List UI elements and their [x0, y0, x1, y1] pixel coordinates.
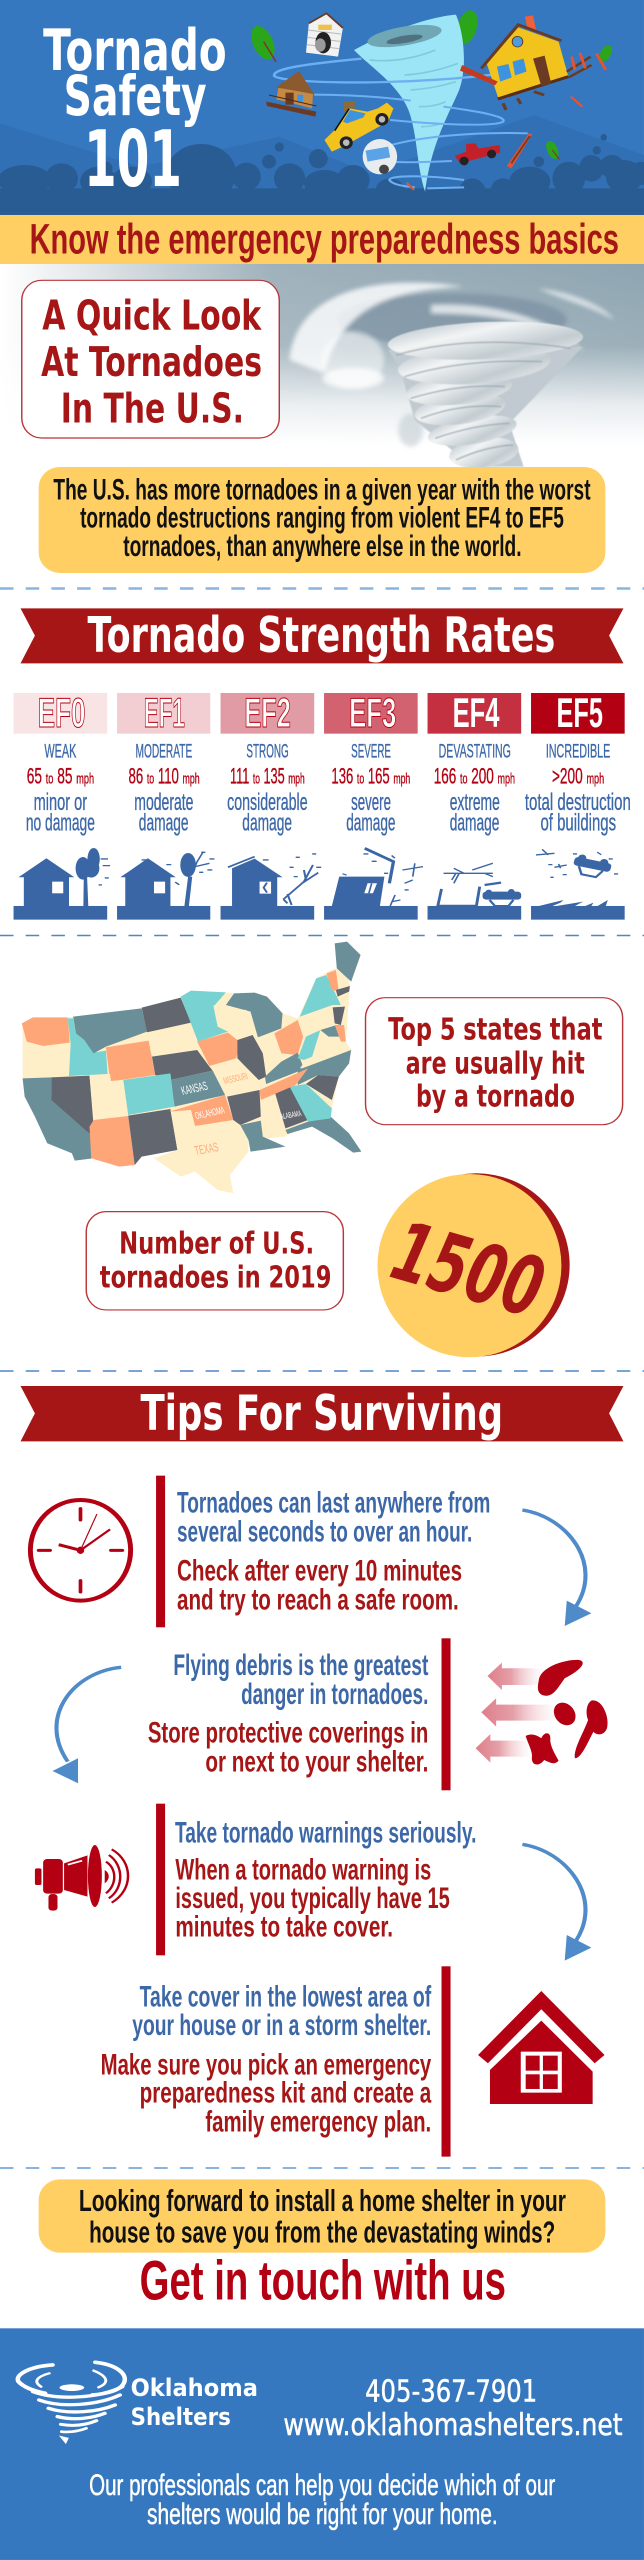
- damage descriptions: no damage: [26, 809, 95, 836]
- callout: number of tornadoes: Number of U.S.: [119, 1226, 314, 1261]
- tip: warnings: minutes to take cover.: [175, 1910, 393, 1943]
- dark bush skyline: [0, 134, 644, 215]
- callout: top 5 states: [366, 998, 623, 1125]
- state labels: TEXAS: [193, 1140, 220, 1158]
- wind speeds: 136 to 165 mph: [331, 765, 410, 789]
- icon: EF3 collapsed house: [324, 848, 423, 920]
- panel: header: [0, 0, 644, 265]
- text block: U.S. facts: [39, 467, 605, 573]
- EF scale labels: EF0: [38, 690, 85, 736]
- logo: wordmark: [131, 2375, 258, 2431]
- icon: EF0 house and tree: [14, 848, 110, 920]
- panel: tips bottom: [35, 1804, 605, 2157]
- icon: grey tornado: [290, 283, 614, 472]
- icon: leaves: [246, 9, 614, 160]
- EF scale labels: EF1: [144, 690, 185, 736]
- panel: call to action and footer: [0, 2179, 644, 2560]
- panel: quick look background: [0, 264, 644, 445]
- map: United States: [22, 942, 361, 1193]
- divider bar: [442, 1638, 451, 1790]
- icon: debris planks: [407, 65, 532, 190]
- tip: debris: or next to your shelter.: [205, 1745, 428, 1778]
- icon: funnel tornado: [354, 15, 464, 192]
- panel: strength rates: [14, 607, 631, 920]
- logo: wordmark: Shelters: [131, 2404, 231, 2431]
- damage descriptions: considerable: [227, 789, 308, 815]
- yellow band: [0, 215, 644, 265]
- icon: yellow taxi: [324, 102, 393, 152]
- icon: house: [478, 1991, 605, 2104]
- tip: debris: danger in tornadoes.: [241, 1677, 428, 1710]
- callout: shelter question: [39, 2179, 605, 2253]
- badge circle: [377, 1173, 570, 1357]
- damage descriptions: damage: [450, 809, 499, 836]
- category names: SEVERE: [351, 741, 391, 762]
- panel: tips top: [21, 1385, 623, 1790]
- EF scale labels: EF3: [349, 690, 396, 736]
- icon: EF1 house and tree: [117, 852, 214, 920]
- panel: quick look: [22, 280, 614, 573]
- icon: EF2 damaged house: [221, 853, 321, 920]
- tip: warnings: When a tornado warning is: [175, 1853, 431, 1886]
- icon: EF5 debris and flipped car: [531, 849, 625, 920]
- title: [43, 17, 227, 205]
- icon: dog house: [306, 13, 343, 57]
- title: Safety: [64, 64, 207, 128]
- tip: take cover: preparedness kit and create a: [140, 2076, 432, 2109]
- callout: A Quick Look: At Tornadoes: [41, 339, 262, 386]
- icon: camper: [363, 139, 397, 174]
- EF scale labels: EF4: [453, 690, 500, 736]
- arrow: curved right: [522, 1844, 591, 1961]
- logo: wordmark: Oklahoma: [131, 2375, 258, 2402]
- damage descriptions: moderate: [134, 789, 193, 815]
- callout: number of tornadoes: [86, 1212, 343, 1310]
- wind speeds: 166 to 200 mph: [434, 765, 515, 789]
- damage descriptions: damage: [242, 809, 292, 836]
- logo: tornado: [18, 2362, 125, 2443]
- icon: clock: [30, 1500, 131, 1601]
- callout: A Quick Look: [22, 280, 279, 438]
- category names: [44, 741, 610, 762]
- contact details: [283, 2374, 623, 2443]
- footer text: [89, 2469, 555, 2531]
- tip: take cover: family emergency plan.: [205, 2105, 431, 2138]
- arrow: curved right: [522, 1510, 591, 1626]
- state labels: KANSAS: [179, 1079, 209, 1098]
- wind speeds: 86 to 110 mph: [129, 765, 200, 789]
- divider bar: [442, 1966, 451, 2157]
- damage descriptions: extreme: [450, 789, 500, 815]
- icon: flying debris: [476, 1660, 608, 1765]
- damage descriptions: severe: [351, 789, 391, 815]
- tip: warnings: [175, 1816, 476, 1943]
- damage descriptions: [26, 789, 631, 836]
- statistic: 1500: 1500: [382, 1204, 554, 1337]
- tip: debris: [148, 1648, 428, 1778]
- tip: duration: [177, 1486, 490, 1616]
- wind speeds: 111 to 135 mph: [230, 765, 305, 789]
- damage descriptions: damage: [139, 809, 189, 836]
- callout: A Quick Look: In The U.S.: [61, 385, 244, 432]
- state labels: OKLAHOMA: [194, 1105, 226, 1122]
- callout: A Quick Look: A Quick Look: [42, 292, 262, 339]
- damage descriptions: minor or: [34, 789, 87, 815]
- wind speeds: 65 to 85 mph: [27, 765, 94, 789]
- panel: map and statistics: [22, 942, 623, 1357]
- icon: wooden cabin: [266, 71, 316, 117]
- callout: number of tornadoes: tornadoes in 2019: [100, 1260, 331, 1295]
- state labels: MISSOURI: [222, 1072, 249, 1087]
- title: 101: [84, 115, 182, 205]
- spiral wind lines: [274, 59, 528, 188]
- icon: red truck: [455, 143, 500, 165]
- wind speeds: >200 mph: [552, 765, 604, 789]
- category names: STRONG: [246, 741, 289, 762]
- damage descriptions: damage: [346, 809, 396, 836]
- state labels: [179, 1072, 302, 1158]
- EF scale labels: [14, 690, 625, 736]
- tip: debris: Store protective coverings in: [148, 1716, 428, 1749]
- map: United States: ALABAMA: [279, 1109, 302, 1121]
- footer background: [0, 2328, 644, 2560]
- wind speeds: [27, 765, 604, 789]
- divider bar: [156, 1476, 165, 1627]
- icon: EF4 flattened house and car: [428, 863, 521, 920]
- tip: debris: Flying debris is the greatest: [173, 1648, 428, 1681]
- icon: megaphone: [35, 1845, 128, 1911]
- contact details: 405-367-7901: [365, 2374, 537, 2410]
- category names: DEVASTATING: [439, 741, 511, 762]
- divider bar: [156, 1804, 165, 1955]
- tip: take cover: [101, 1980, 432, 2138]
- icon: yellow house: [481, 15, 606, 110]
- arrow: curved left: [53, 1667, 121, 1783]
- category names: MODERATE: [136, 741, 192, 762]
- category names: WEAK: [44, 741, 76, 762]
- EF scale labels: EF2: [244, 690, 291, 736]
- title: Tornado: [43, 17, 227, 83]
